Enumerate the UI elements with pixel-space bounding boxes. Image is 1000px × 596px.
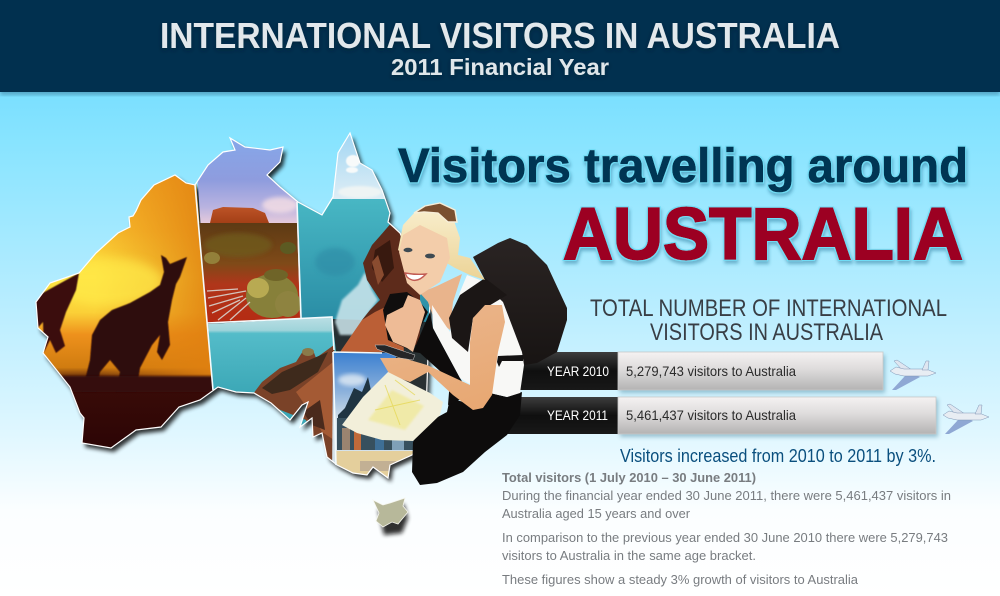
small kangaroo silhouette bbox=[36, 274, 80, 354]
bar: year 2011: 5,461,437 visitors to Australia bbox=[626, 407, 796, 423]
text block: total visitors: visitors to Australia in the same age bracket. bbox=[502, 548, 756, 563]
woman traveller with backpack bbox=[342, 203, 567, 485]
panel dividers bbox=[195, 185, 382, 465]
black arch behind left arm bbox=[383, 292, 428, 350]
header band bbox=[0, 0, 1000, 95]
subheading: total number of visitors: TOTAL NUMBER OF INTERNATIONAL bbox=[590, 295, 947, 322]
right arm bbox=[380, 305, 505, 410]
neck bbox=[420, 274, 462, 330]
map outline bbox=[36, 133, 430, 478]
bar: year 2010 bbox=[510, 352, 885, 393]
callout: visitors increased: Visitors increased from 2010 to 2011 by 3%. bbox=[620, 446, 936, 466]
text block: total visitors bbox=[502, 470, 951, 587]
eyes and mouth bbox=[404, 248, 435, 280]
black band on top bbox=[497, 355, 523, 367]
white top bbox=[432, 275, 524, 397]
backpack strap bbox=[449, 278, 507, 352]
black vest bbox=[413, 312, 470, 405]
bar: year 2011: YEAR 2011 bbox=[547, 407, 608, 423]
heading: AUSTRALIA: AUSTRALIA bbox=[563, 194, 963, 275]
bar: year 2010: YEAR 2010 bbox=[547, 363, 609, 379]
backpack bbox=[473, 238, 567, 365]
phone bbox=[375, 345, 415, 360]
hair bbox=[398, 207, 485, 280]
folded paper map bbox=[342, 372, 443, 441]
subheading: total number of visitors bbox=[590, 295, 947, 346]
heading: Visitors travelling around: Visitors travelling around bbox=[398, 140, 968, 193]
title: INTERNATIONAL VISITORS IN AUSTRALIA bbox=[160, 15, 840, 56]
sunglasses bbox=[414, 203, 457, 222]
icon: Tasmania bbox=[373, 498, 408, 535]
map of Australia collage bbox=[20, 130, 433, 483]
face bbox=[399, 225, 450, 295]
large kangaroo silhouette bbox=[86, 254, 188, 378]
bar: year 2010: 5,279,743 visitors to Australia bbox=[626, 363, 796, 379]
rocky cliff bbox=[358, 222, 420, 345]
text block: total visitors: In comparison to the previous year ended 30 June 2010 there were 5,279,743 bbox=[502, 530, 948, 545]
text block: total visitors: Australia aged 15 years and over bbox=[502, 506, 691, 521]
left arm and pointing hand bbox=[385, 295, 425, 352]
text block: total visitors: Total visitors (1 July 2010 – 30 June 2011) bbox=[502, 470, 756, 485]
text block: total visitors: During the financial year ended 30 June 2011, there were 5,461,437 visitors in bbox=[502, 488, 951, 503]
panel: southern ocean and cliffs bbox=[208, 318, 336, 460]
map photo panels bbox=[20, 130, 430, 483]
panel: city beach photo bbox=[332, 352, 414, 477]
icon: plane 2010 bbox=[890, 360, 936, 390]
panel: Uluru bbox=[195, 140, 301, 323]
subtitle: 2011 Financial Year bbox=[391, 54, 609, 80]
icon: plane 2011 bbox=[943, 404, 989, 434]
bar: year 2011 bbox=[500, 397, 938, 437]
text block: total visitors: These figures show a steady 3% growth of visitors to Australia bbox=[502, 572, 859, 587]
subheading: total number of visitors: VISITORS IN AUSTRALIA bbox=[650, 319, 883, 346]
panel: Queensland coast bbox=[297, 130, 430, 352]
legs bbox=[412, 392, 522, 485]
panel: kangaroo sunset bbox=[36, 176, 212, 448]
